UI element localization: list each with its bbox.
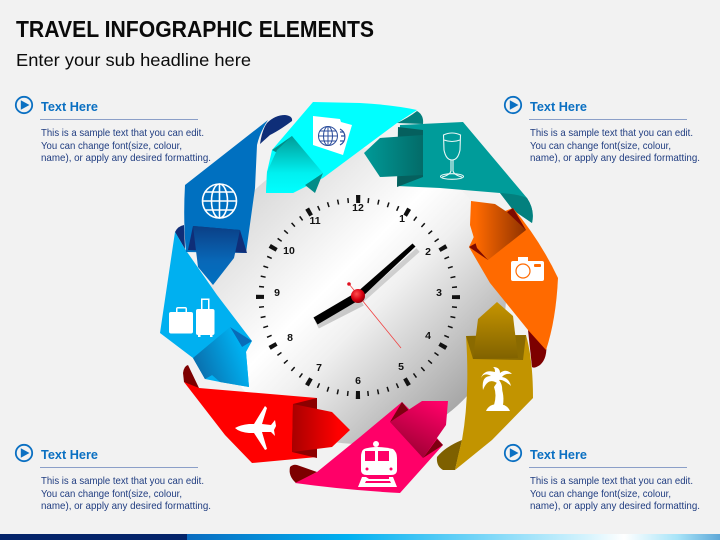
title: TRAVEL INFOGRAPHIC ELEMENTS xyxy=(16,16,374,42)
text block: bottom left: This is a sample text that you can edit. xyxy=(41,475,204,487)
text block: bottom right: This is a sample text that you can edit. xyxy=(530,475,693,487)
clock face: 5 xyxy=(398,361,404,373)
icon: plane xyxy=(235,406,276,450)
ribbon: light blue with luggage xyxy=(160,225,252,387)
clock face: 8 xyxy=(287,332,293,344)
ribbon: pink with train xyxy=(290,401,448,493)
text block: top left xyxy=(16,97,211,164)
subtitle: Enter your sub headline here xyxy=(16,50,251,70)
ribbon: orange with camera xyxy=(469,201,558,368)
text block: bottom left: You can change font(size, colour, xyxy=(41,488,182,500)
text block: top left: name), or apply any desired formatting. xyxy=(41,152,211,164)
clock face: 1 xyxy=(399,213,405,225)
clock face: 4 xyxy=(425,330,431,342)
clock face: 6 xyxy=(355,375,361,387)
text block: bottom right xyxy=(505,445,700,512)
clock face xyxy=(260,199,456,395)
icon: camera xyxy=(511,257,544,281)
icon: luggage xyxy=(169,298,214,337)
clock face: 12 xyxy=(352,202,364,214)
ribbon: blue with globe xyxy=(184,115,292,285)
icon: wine glass xyxy=(440,133,464,179)
bottom bar xyxy=(0,534,720,540)
clock face: 10 xyxy=(283,245,295,257)
text block: bottom right: name), or apply any desired formatting. xyxy=(530,500,700,512)
text block: top left: This is a sample text that you can edit. xyxy=(41,127,204,139)
text block: bottom left: Text Here xyxy=(41,447,98,462)
icon: palm tree xyxy=(481,367,512,411)
text block: top left: Text Here xyxy=(41,99,98,114)
clock disc xyxy=(210,148,506,444)
icon: globe xyxy=(202,184,236,218)
icon: document with globe xyxy=(313,116,352,155)
text block: top right: name), or apply any desired formatting. xyxy=(530,152,700,164)
text block: top right: This is a sample text that you can edit. xyxy=(530,127,693,139)
text block: bottom right: Text Here xyxy=(530,447,587,462)
icon: train xyxy=(358,441,397,487)
clock face: 11 xyxy=(309,215,321,227)
ribbon: cyan with document globe xyxy=(266,102,417,193)
text block: top right xyxy=(505,97,700,164)
text block: bottom left: name), or apply any desired formatting. xyxy=(41,500,211,512)
clock face: 3 xyxy=(436,287,442,299)
ribbon: gold with palm tree xyxy=(437,302,533,470)
text block: bottom left xyxy=(16,445,211,512)
clock hands xyxy=(316,244,418,348)
clock face: 9 xyxy=(274,287,280,299)
ribbon: red with plane xyxy=(183,365,350,463)
ribbon: teal with wine glass xyxy=(364,111,533,223)
text block: top left: You can change font(size, colour, xyxy=(41,140,182,152)
text block: top right: Text Here xyxy=(530,99,587,114)
clock face: 7 xyxy=(316,362,322,374)
text block: top right: You can change font(size, colour, xyxy=(530,140,671,152)
clock face: 2 xyxy=(425,246,431,258)
text block: bottom right: You can change font(size, colour, xyxy=(530,488,671,500)
